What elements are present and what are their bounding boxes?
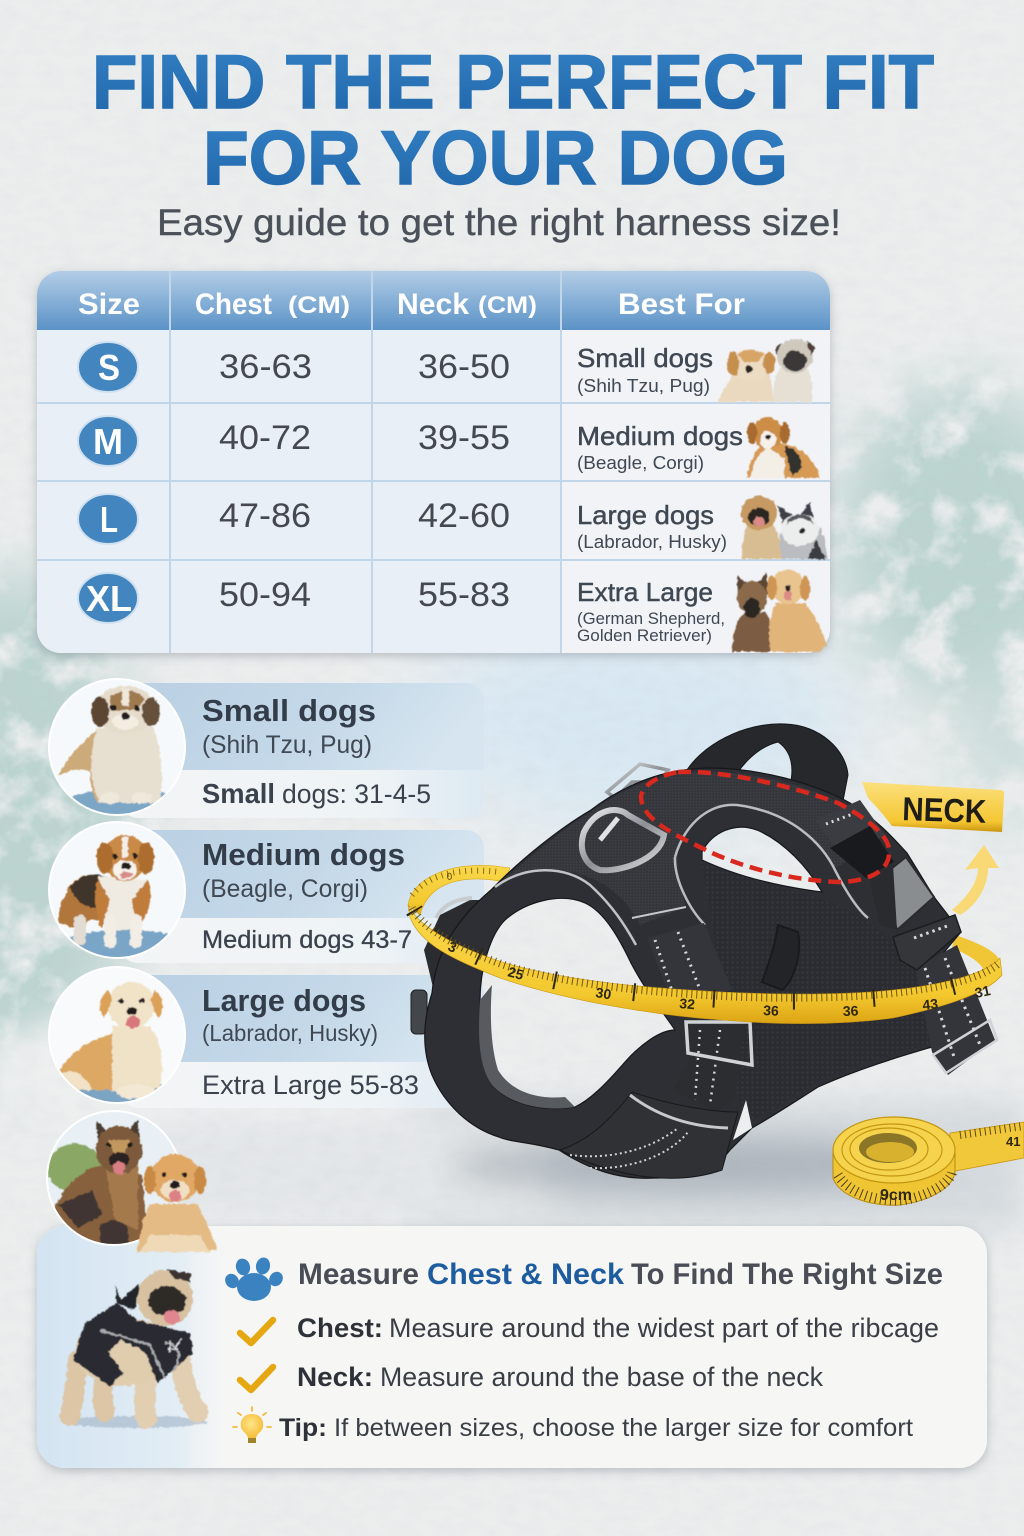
table header row: (CM): [478, 292, 537, 319]
neck instruction: Neck:: [297, 1362, 373, 1392]
card: large dogs: [120, 975, 484, 1108]
card: large dogs: Extra Large 55-83: [202, 1070, 419, 1100]
neck label: [862, 782, 1004, 832]
tape numbers: 3: [446, 938, 459, 956]
best for labels: (German Shepherd,: [577, 609, 725, 628]
best for labels: [577, 343, 743, 645]
lower strap: [560, 1092, 738, 1178]
d-ring: [582, 810, 664, 870]
size badges: [78, 342, 138, 623]
size table: [37, 271, 830, 653]
table dogs: small: [717, 339, 816, 402]
heading: Measure: [298, 1258, 419, 1291]
tip: Tip:: [279, 1414, 327, 1442]
tape numbers: 36: [763, 1002, 779, 1019]
table dogs: large: [741, 496, 827, 559]
icon: check chest: [240, 1320, 273, 1343]
dog photo: medium dog: [49, 822, 193, 966]
title: FIND THE PERFECT FIT: [92, 40, 934, 125]
arrow up to neck label: [952, 845, 999, 915]
measurements: [219, 348, 510, 614]
card: medium dogs: Medium dogs: [202, 837, 405, 872]
heading: [298, 1258, 943, 1291]
table header row: Chest: [195, 288, 272, 321]
card: medium dogs: Medium dogs 43-7: [202, 926, 412, 954]
table header row: Size: [78, 288, 140, 321]
heading: To Find The Right Size: [631, 1258, 943, 1291]
title: FOR YOUR DOG: [203, 116, 788, 201]
back mesh panel: [702, 863, 930, 1122]
measurements: 36-50: [418, 348, 510, 386]
best for labels: Golden Retriever): [577, 626, 712, 645]
measurements: 39-55: [418, 419, 510, 457]
red dashed neck guide: [641, 772, 889, 882]
subtitle: Easy guide to get the right harness size!: [157, 202, 841, 243]
title: [92, 40, 934, 201]
table dogs: extra large: [732, 570, 827, 652]
measurements: 40-72: [219, 419, 311, 457]
neck strap and buckle: [815, 800, 885, 860]
table header row: [78, 288, 745, 321]
measurements: 47-86: [219, 497, 311, 535]
rolled measuring tape: 41: [1006, 1134, 1020, 1149]
chest instruction: Chest:: [297, 1313, 383, 1343]
size badges: L: [100, 499, 118, 540]
main body silhouette: [425, 768, 961, 1178]
heading: Chest & Neck: [427, 1258, 624, 1291]
tip: If between sizes, choose the larger size for comfort: [334, 1414, 913, 1442]
best for labels: Extra Large: [577, 577, 713, 607]
measurements: 36-63: [219, 348, 312, 386]
table dogs: medium: [747, 417, 820, 478]
best for labels: Medium dogs: [577, 421, 743, 451]
card: small dogs: Small dogs: [202, 693, 376, 728]
measurements: 42-60: [418, 497, 510, 535]
measuring tape: front section: [408, 905, 1002, 1024]
harness shadow: [450, 1137, 950, 1193]
right strap: [915, 945, 995, 1075]
measuring tape: back section: [408, 865, 1001, 975]
card: small dogs: Small: [202, 778, 275, 809]
tape numbers: [446, 938, 992, 1019]
tape numbers: 36: [843, 1002, 859, 1019]
size badges: S: [98, 347, 120, 388]
measuring tape: back section: 0: [446, 871, 453, 883]
tape numbers: 25: [506, 963, 526, 983]
icon: paw: [222, 1256, 286, 1301]
measurements: 55-83: [418, 576, 510, 614]
icon: light bulb: [233, 1407, 271, 1443]
neck instruction: Measure around the base of the neck: [380, 1362, 823, 1392]
table header row: (CM): [288, 292, 350, 319]
strap and slider buckle: [672, 1020, 745, 1112]
measurements: 50-94: [219, 576, 311, 614]
tape numbers: 43: [922, 995, 939, 1013]
padded loop inner: [479, 985, 575, 1109]
size badges: XL: [86, 578, 132, 619]
best for labels: (Beagle, Corgi): [577, 453, 704, 473]
chest arc reflective line: [495, 870, 636, 945]
harness: [411, 724, 997, 1178]
table header row: Neck: [397, 288, 469, 321]
best for labels: Small dogs: [577, 343, 713, 373]
card: large dogs: Large dogs: [202, 983, 366, 1018]
rolled measuring tape: 9cm: [880, 1187, 912, 1204]
best for labels: (Shih Tzu, Pug): [577, 376, 710, 396]
card: large dogs: (Labrador, Husky): [202, 1020, 378, 1046]
tape numbers: 30: [595, 984, 613, 1002]
top handle: [684, 724, 848, 806]
panel: how to measure: [37, 1226, 987, 1468]
icon: check neck: [240, 1367, 273, 1390]
dog photo: small dog: [49, 679, 187, 821]
card: small dogs: [120, 683, 484, 818]
best for labels: (Labrador, Husky): [577, 532, 727, 552]
card: small dogs: dogs: 31-4-5: [282, 779, 431, 809]
table header row: Best For: [618, 288, 745, 321]
webbing and side ring: [424, 900, 490, 1000]
card: medium dogs: [120, 830, 484, 963]
tape numbers: 32: [679, 995, 696, 1012]
chest instruction: Measure around the widest part of the ribcage: [389, 1313, 939, 1343]
pug in harness: [63, 1269, 207, 1428]
neck label: NECK: [902, 790, 987, 830]
reflective webbing: vertical strap: [647, 923, 732, 1002]
neck binding reflective line: [675, 805, 868, 925]
card: medium dogs: (Beagle, Corgi): [202, 875, 368, 903]
size badges: M: [93, 421, 123, 462]
card: small dogs: (Shih Tzu, Pug): [202, 731, 372, 759]
dog photo: large dog: [47, 967, 185, 1108]
best for labels: Large dogs: [577, 500, 714, 530]
metal ring top: [607, 764, 668, 798]
tape numbers: 31: [973, 982, 992, 1001]
rolled measuring tape: [833, 1117, 1024, 1205]
dog photo: extra large dogs: [47, 1111, 217, 1252]
chest plate fabric: [497, 772, 878, 925]
